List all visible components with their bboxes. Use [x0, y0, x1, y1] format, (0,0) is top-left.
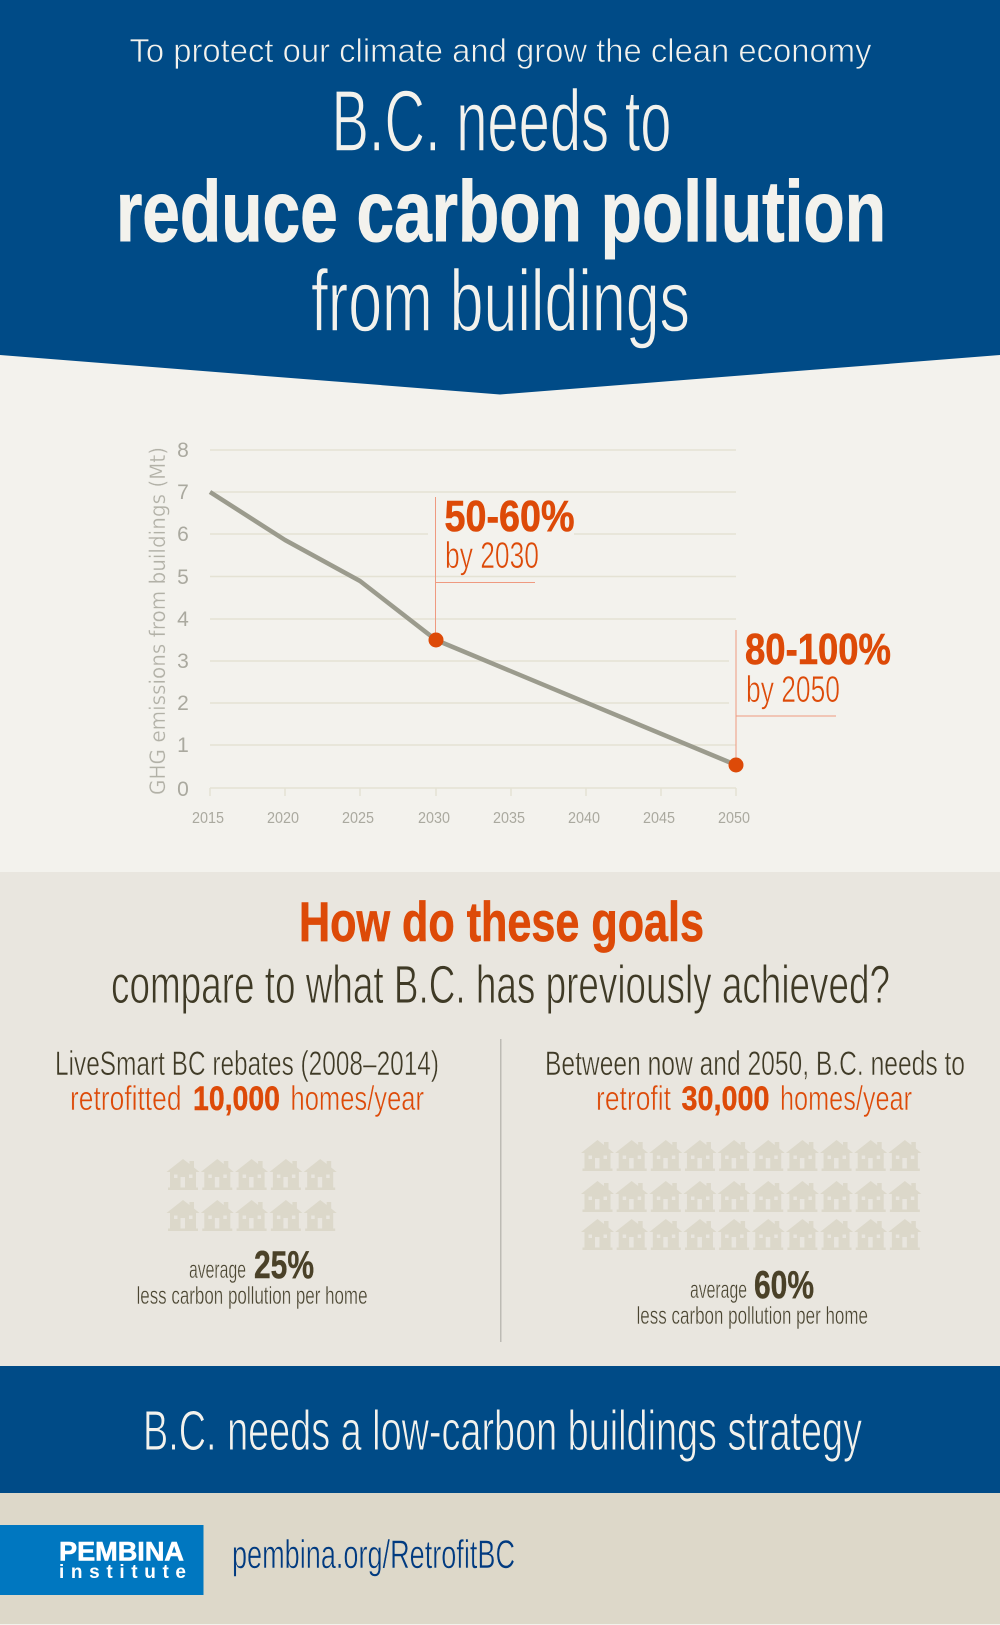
callout: 2050 target: 80-100% [745, 625, 891, 674]
panel: footer [0, 1493, 1000, 1624]
stat: 25%: less carbon pollution per home [136, 1282, 368, 1310]
y axis labels: 3 [177, 650, 189, 673]
x axis labels: 2015 [192, 810, 224, 827]
stat: 60%: less carbon pollution per home [636, 1302, 868, 1330]
chart grid lines [210, 450, 736, 796]
logo: Pembina Institute [0, 1525, 204, 1595]
left column: LiveSmart BC [55, 1045, 439, 1310]
right column: needed retrofits: 30,000 [682, 1080, 770, 1118]
callout: 2050 target: by 2050 [746, 669, 840, 710]
panel: comparison [0, 872, 1000, 1366]
right column: needed retrofits [545, 1045, 965, 1330]
right column: needed retrofits: homes/year [780, 1080, 912, 1118]
callout: 2050 target [728, 625, 891, 772]
left column: LiveSmart BC: LiveSmart BC rebates (2008–2014) [55, 1045, 439, 1083]
x axis labels: 2035 [493, 810, 525, 827]
stat: 25% [136, 1244, 368, 1310]
y axis labels: 7 [177, 481, 189, 504]
stat: 25%: 25% [254, 1244, 314, 1287]
y axis labels: 5 [177, 566, 189, 589]
website link: pembina.org/RetrofitBC [232, 1533, 515, 1577]
y axis labels: 0 [177, 778, 189, 801]
panel: call to action banner [0, 1366, 1000, 1493]
left column: LiveSmart BC: retrofitted [70, 1080, 182, 1118]
stat: 60%: average [690, 1276, 747, 1304]
y axis labels: 2 [177, 692, 189, 715]
y axis title: GHG emissions from buildings (Mt) [146, 447, 171, 795]
x axis labels: 2020 [267, 810, 299, 827]
y axis labels: 1 [177, 734, 189, 757]
line chart: GHG emissions [146, 439, 891, 827]
stat: 60%: 60% [754, 1264, 814, 1307]
stat: 25%: average [189, 1256, 246, 1284]
y axis labels: 8 [177, 439, 189, 462]
title line 3: from buildings [311, 253, 690, 350]
emissions trend line [210, 492, 736, 765]
subtitle: To protect our climate and grow the clean economy [130, 33, 872, 70]
x axis labels [192, 810, 750, 827]
callout: 2030 target [428, 492, 574, 648]
y axis labels: 6 [177, 523, 189, 546]
y axis labels: 4 [177, 608, 189, 631]
logo: Pembina Institute: institute [59, 1562, 186, 1583]
callout: 2030 target: 50-60% [444, 492, 574, 541]
divider [500, 1039, 502, 1342]
icons: 30 houses [581, 1140, 921, 1250]
x axis labels: 2040 [568, 810, 600, 827]
x axis labels: 2030 [418, 810, 450, 827]
x axis labels: 2025 [342, 810, 374, 827]
comparison heading: How do these goals [299, 890, 704, 953]
right column: needed retrofits: retrofit [596, 1080, 671, 1118]
title line 1: B.C. needs to [332, 73, 672, 170]
x axis labels: 2045 [643, 810, 675, 827]
stat: 60% [636, 1264, 868, 1330]
icons: 10 houses [166, 1159, 337, 1231]
left column: LiveSmart BC: 10,000 [193, 1080, 280, 1118]
y axis labels [177, 439, 189, 801]
logo: Pembina Institute: PEMBINA [59, 1536, 184, 1566]
x axis labels: 2050 [718, 810, 750, 827]
callout: 2030 target: by 2030 [445, 535, 539, 576]
left column: LiveSmart BC: homes/year [290, 1080, 424, 1118]
panel: header banner [0, 0, 1000, 394]
